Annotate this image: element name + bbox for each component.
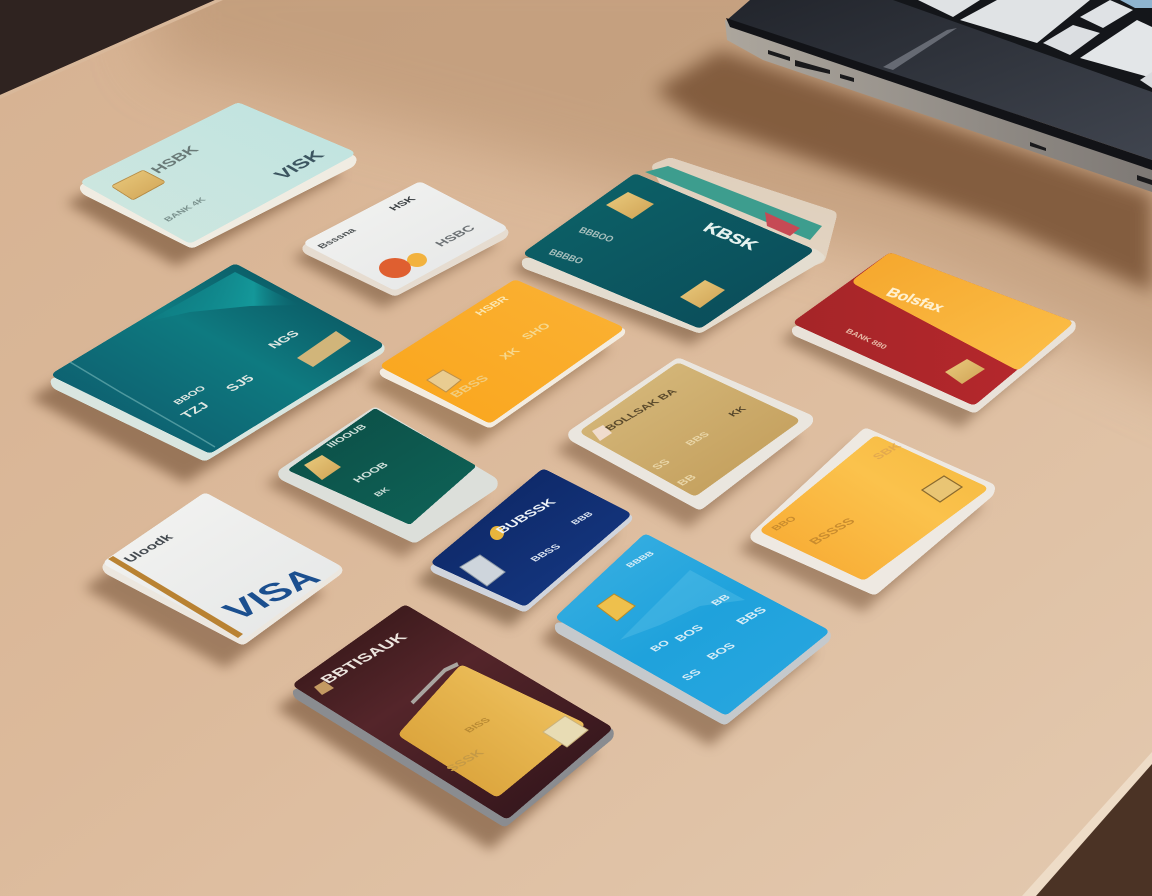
logo [379, 253, 427, 278]
card text: BBBBO [546, 248, 585, 267]
card text: TZJ [178, 400, 212, 420]
card text: BBO [770, 515, 799, 532]
card text [447, 295, 554, 399]
card: teal with stacked back card [510, 157, 838, 345]
card: white VISA [84, 492, 343, 668]
chips [606, 192, 725, 308]
card: yellow [738, 427, 996, 612]
card text [546, 220, 762, 267]
card: dark green [265, 406, 498, 558]
card text [493, 497, 596, 563]
laptop trackpad line [883, 28, 957, 70]
card text [325, 423, 392, 498]
small logo [314, 681, 334, 695]
card text: HSBR [473, 295, 512, 317]
card: orange [365, 279, 626, 446]
card text [316, 195, 478, 250]
small logo [592, 425, 612, 441]
card: pale mint [66, 102, 358, 266]
card text: VISA [211, 565, 332, 624]
card text: BOS [703, 641, 739, 661]
card: bright blue [540, 533, 831, 746]
card: navy [415, 468, 633, 627]
card text: HSK [387, 195, 419, 212]
card: white with mastercard-style logo [292, 181, 510, 308]
card text: SS [650, 458, 673, 471]
card text: SBK [869, 441, 904, 461]
card text: KK [727, 405, 750, 418]
card text: BK [372, 486, 392, 498]
card text: HSBC [432, 223, 478, 248]
card text: IIIOOUB [325, 423, 370, 449]
laptop [725, 0, 1152, 192]
card: gold [555, 357, 814, 528]
chip [304, 455, 341, 480]
card text: BBTISAUK [317, 631, 411, 686]
laptop shadow [655, 50, 1152, 292]
chip [111, 170, 166, 200]
card text: BO [648, 639, 673, 653]
laptop side edge [725, 20, 1152, 192]
card text: BBS [684, 431, 713, 447]
card text [172, 328, 303, 420]
card text: BISS [463, 716, 494, 734]
card text: BOS [671, 623, 707, 643]
card: orange and red [780, 252, 1076, 428]
card text [844, 285, 948, 351]
gold panel [397, 664, 587, 798]
chip [597, 594, 635, 621]
card text: HSBK [148, 144, 203, 176]
card text: BOLLSAK BA [603, 388, 680, 432]
gold panel rail [412, 664, 458, 703]
chip [945, 359, 985, 384]
card text: BBS [733, 605, 770, 626]
card text: BANK 880 [844, 327, 889, 351]
card text: BUBSSK [493, 497, 559, 535]
card text [121, 532, 332, 624]
chip [543, 716, 588, 747]
card text: Bsssna [316, 227, 359, 250]
card text: BB [675, 473, 699, 487]
card text: VISK [270, 148, 329, 182]
card text: BBOO [172, 385, 209, 406]
card text: HOOB [351, 461, 391, 484]
laptop top deck [727, 0, 1152, 160]
card text: BBBB [624, 550, 657, 569]
card text [317, 631, 494, 773]
card text: KBSK [699, 220, 762, 253]
card text: BBSS [529, 543, 564, 563]
card text: SHO [518, 321, 554, 341]
card text: NGS [265, 328, 303, 350]
card text [770, 441, 904, 546]
card text: BBB [569, 510, 596, 526]
card text: XK [496, 346, 523, 361]
card text [603, 388, 750, 487]
card text: BANK 4K [162, 196, 208, 223]
laptop keyboard [893, 0, 1152, 92]
card text: Bolsfax [882, 285, 948, 315]
laptop ports [768, 50, 1152, 185]
card text: Uloodk [121, 532, 176, 564]
chip [922, 476, 962, 502]
card text: BB [709, 593, 733, 607]
card: large teal [30, 263, 386, 483]
card text: SJ5 [223, 373, 258, 393]
card text: SSSK [443, 747, 488, 773]
logo [490, 526, 504, 540]
chip [460, 555, 505, 586]
card text [148, 144, 329, 223]
card text: BSSSS [806, 516, 859, 546]
card text [624, 550, 770, 682]
chip [427, 370, 461, 392]
card: maroon with gold panel [276, 604, 614, 850]
logo block [297, 331, 351, 367]
card text: BBSS [447, 373, 492, 399]
card text: BBBOO [576, 226, 616, 245]
card text: SS [678, 667, 704, 682]
